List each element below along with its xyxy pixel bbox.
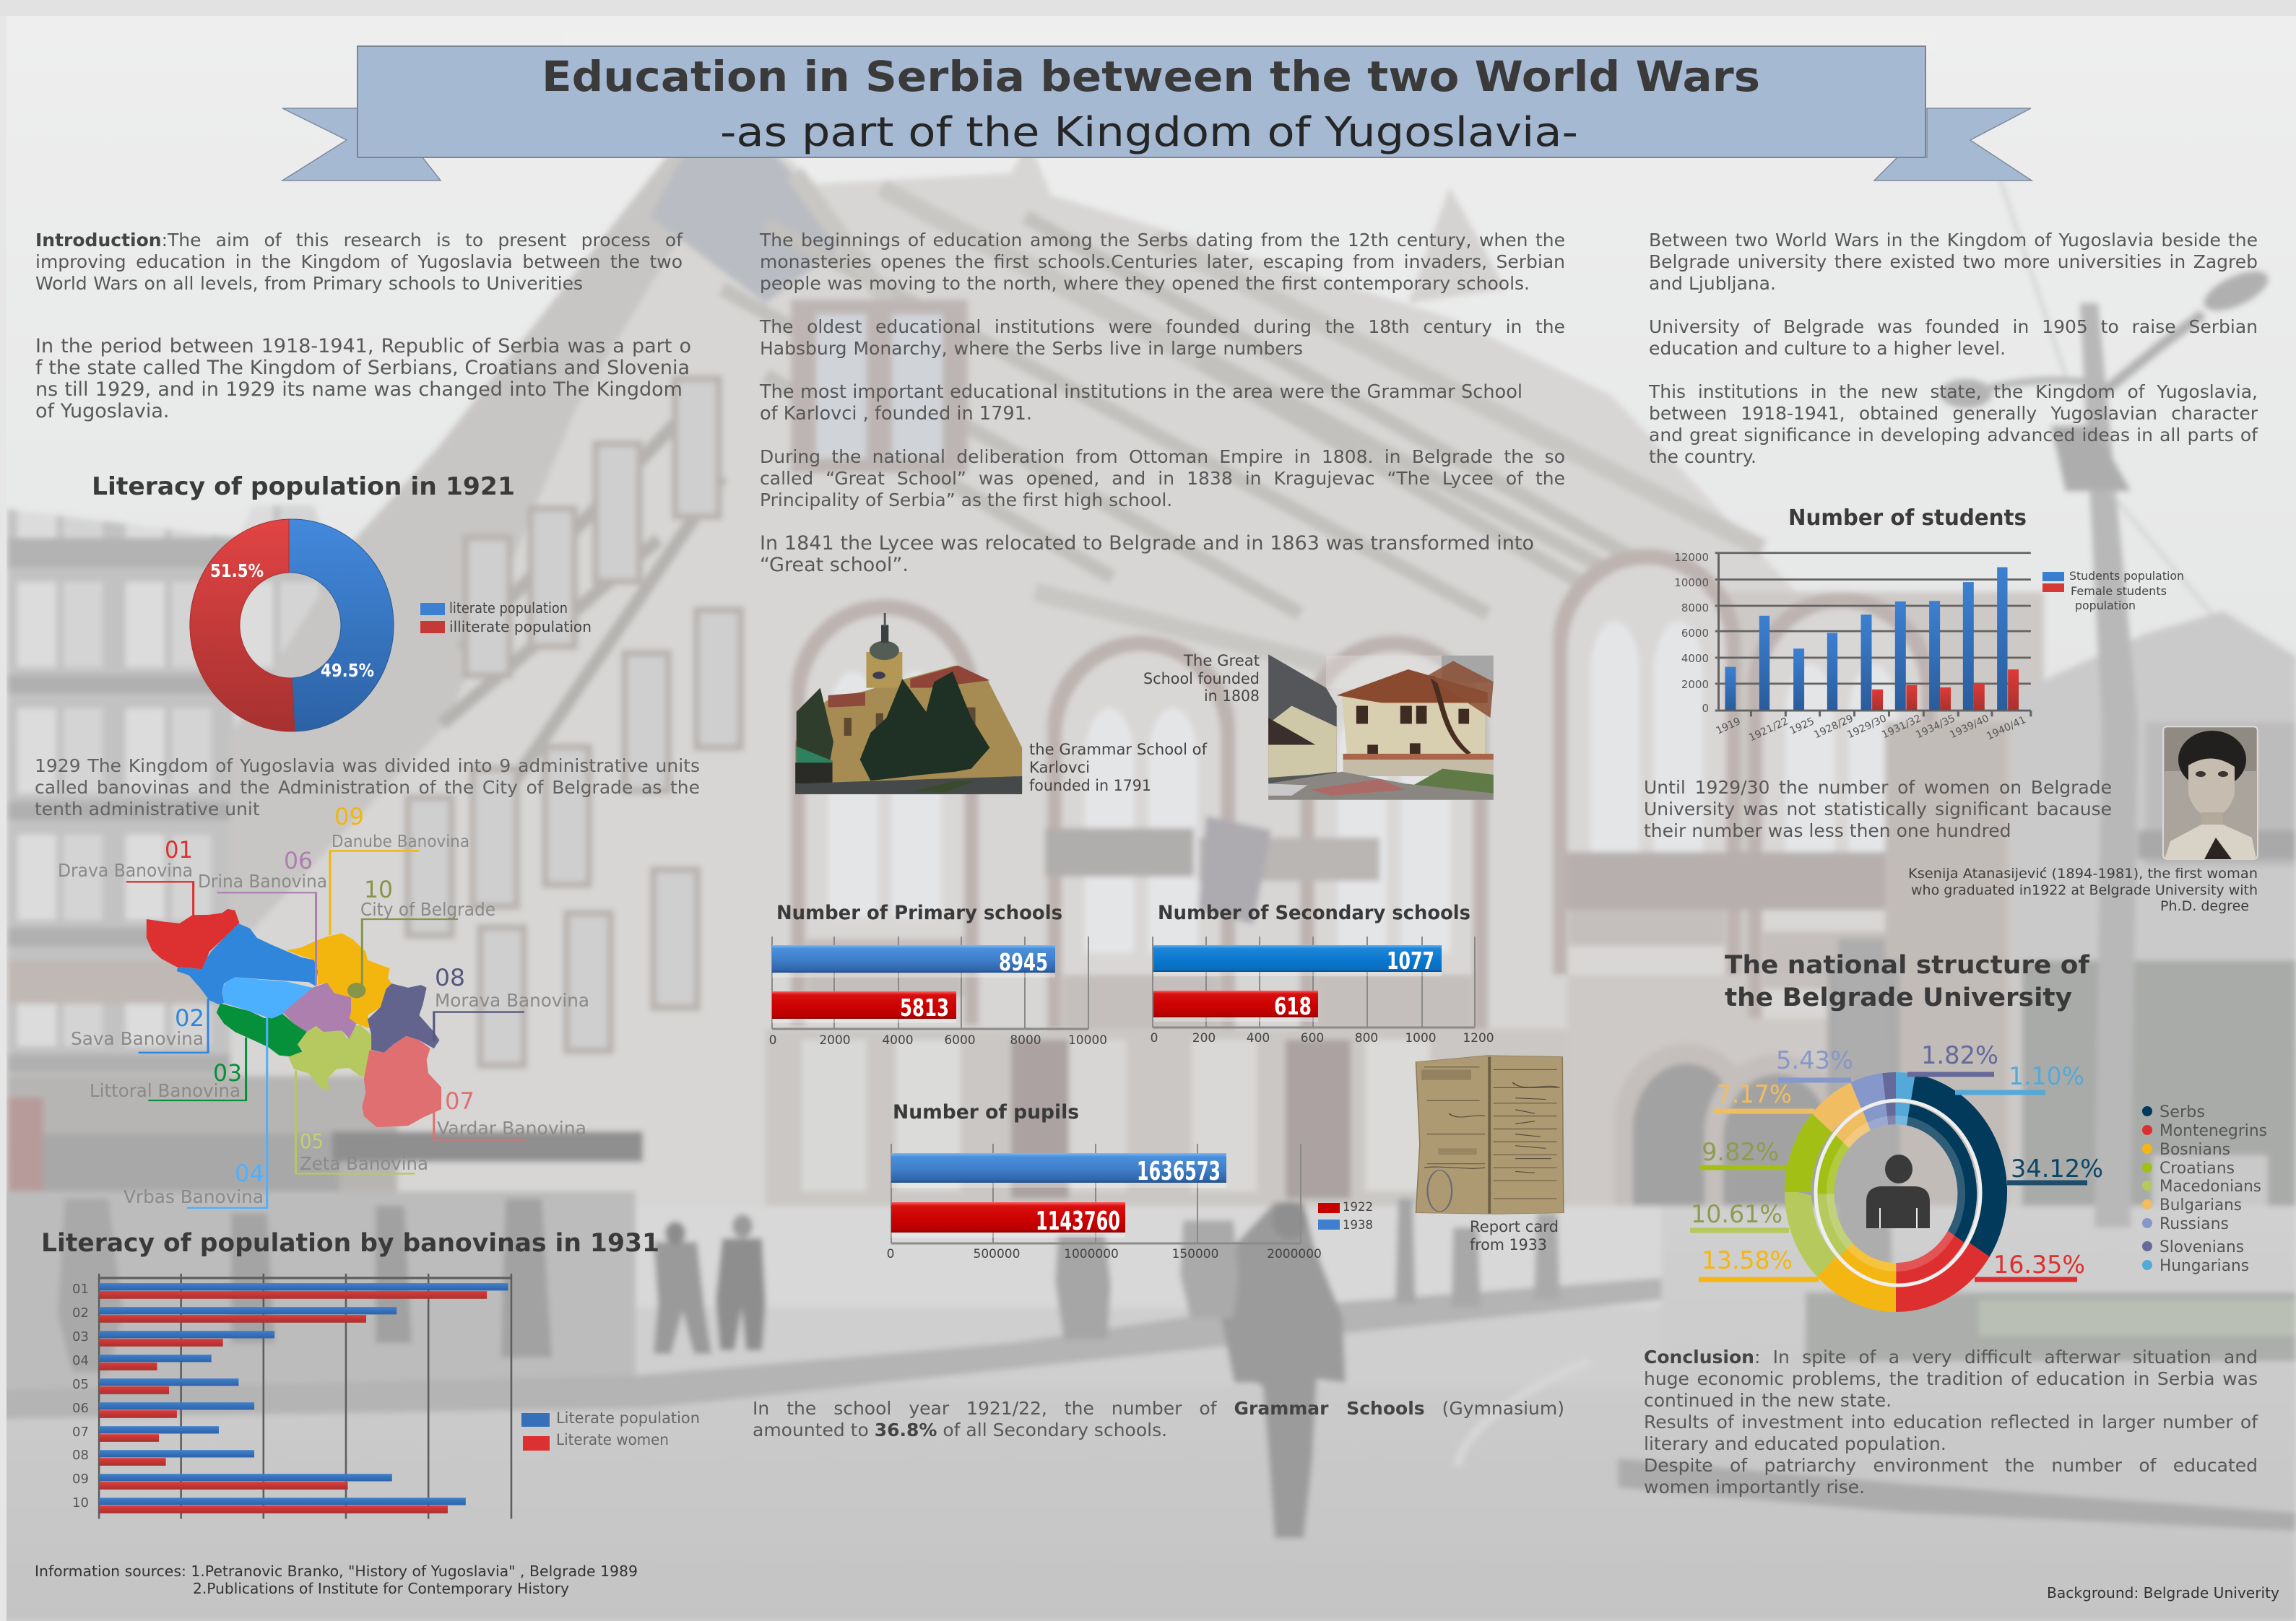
map labels: Drina Banovina [198,871,327,892]
axis labels: 1000000 [1064,1247,1119,1261]
background credit: Background: Belgrade Univerity [2047,1584,2279,1602]
x axis labels: 1928/29 [1812,713,1855,741]
photo: Grammar School of Karlovci [795,613,1022,794]
text: women at university [1644,777,2112,842]
axis labels: 150000 [1172,1247,1218,1261]
x axis labels: 1929/30 [1845,713,1889,741]
legend: national structure: Hungarians [2159,1257,2249,1275]
text: oldest institutions [760,316,1565,359]
caption: Grammar School [1029,741,1208,794]
text: Lycee relocated [760,532,1534,576]
text: conclusion: Despite of patriarchy environment the number of educated [1644,1455,2258,1476]
category labels: 10 [72,1495,89,1511]
student bars [1725,568,2019,710]
legend: national structure: Montenegrins [2159,1122,2267,1140]
x axis labels: 1931/32 [1880,713,1923,741]
text: period 1918-1941: ns till 1929, and in 1929 its name was changed into The Kingdom [35,378,683,401]
icon: person [1866,1155,1930,1228]
grid and axis [891,1144,1301,1243]
text: beginnings of education [760,230,1565,294]
text: Grammar Schools share: In the school year 1921/22, the number of Grammar Schools (Gymnasium) [753,1398,1564,1419]
legend: Students population [2069,569,2184,583]
text: universities: Belgrade university there existed two more universities in Zagreb [1649,251,2258,272]
axis labels [1151,1031,1494,1046]
category labels: 02 [72,1305,89,1321]
text: Grammar School of Karlovci: of Karlovci , founded in 1791. [760,403,1032,425]
map labels [58,803,589,1207]
text: administrative units: tenth administrative unit [35,799,260,820]
legend: national structure: Slovenians [2159,1238,2244,1256]
left shopfront [7,1076,643,1372]
legend: literacy 1921: illiterate population [449,618,592,635]
y axis labels: 12000 [1674,551,1709,564]
inner band [1824,1113,1967,1274]
bar 8945 [772,945,1055,973]
text: introduction: improving education in the Kingdom of Yugoslavia between the two [35,251,683,272]
bar chart: Primary schools [769,936,1107,1048]
axis labels: 2000 [819,1033,851,1048]
value 51.5%: 51.5% [210,560,264,581]
caption: Grammar School: Karlovci [1029,759,1090,776]
callout values [1691,1041,2103,1279]
map regions [147,909,441,1127]
street [0,1191,2296,1621]
text: Great School: During the national deliberation from Ottoman Empire in 1808. in Belgrade the so [760,446,1565,467]
text: oldest institutions: Habsburg Monarchy, where the Serbs live in large numbers [760,338,1303,359]
text: Grammar Schools share: amounted to 36.8% of all Secondary schools. [753,1420,1167,1440]
y axis labels: 4000 [1681,652,1709,665]
legend: national structure: Russians [2159,1215,2229,1233]
x axis labels: 1921/22 [1747,716,1790,744]
portrait caption [1908,866,2258,914]
text: Great School [760,446,1565,510]
map labels: Sava Banovina [71,1028,204,1049]
information sources [35,1563,638,1597]
map labels: 03 [213,1059,242,1087]
category labels: 09 [72,1472,89,1487]
y axis labels [1674,551,1709,715]
text: women at university: Until 1929/30 the number of women on Belgrade [1644,777,2112,798]
text: conclusion: women importantly rise. [1644,1477,1865,1498]
category labels: 05 [72,1377,89,1392]
map labels: 05 [300,1129,324,1153]
text: administrative units: 1929 The Kingdom of Yugoslavia was divided into 9 administrative units [35,755,700,776]
subtitle: -as part of the Kingdom of Yugoslavia- [720,109,1578,156]
value 5813: 5813 [900,994,949,1022]
axis labels: 200 [1192,1031,1216,1046]
category labels: 08 [72,1448,89,1463]
category labels: 06 [72,1401,89,1416]
category labels: 03 [72,1329,89,1344]
bar 1077 [1153,945,1442,972]
grid and axis [1153,936,1475,1027]
axis labels [769,1033,1107,1048]
legend: Female students [2071,584,2167,598]
heading: literacy by banovinas: Literacy of population by banovinas in 1931 [41,1229,659,1258]
heading: Number of students: Number of students [1788,505,2027,531]
text: administrative units [35,755,700,820]
title: Education in Serbia between the two World Wars [542,52,1760,101]
x axis labels: 1919 [1715,716,1743,737]
legend: 1922 [1343,1200,1373,1214]
map labels: Danube Banovina [332,833,469,851]
bar 618 [1153,991,1318,1017]
text: new state [1649,381,2258,468]
heading: Number of pupils: Number of pupils [893,1101,1079,1124]
bar 1636573 [891,1153,1226,1183]
map labels: Vrbas Banovina [124,1186,264,1207]
portrait caption: Ksenija Atanasijević (1894-1981), the first woman [1908,866,2258,882]
text: conclusion [1644,1347,2258,1498]
axis labels: 8000 [1010,1033,1041,1048]
axis labels: 6000 [944,1033,976,1048]
bar 5813 [772,991,956,1019]
axis labels: 600 [1301,1031,1324,1046]
x axis labels: 1939/40 [1948,713,1991,741]
x axis labels: 1925 [1788,716,1816,737]
bar chart: Secondary schools [1151,936,1494,1046]
outer band [1798,1087,1993,1298]
value 49.5%: 49.5% [321,660,374,681]
y axis labels: 2000 [1681,678,1709,691]
column chart: Number of students [1674,551,2184,744]
text: Lycee relocated: “Great school”. [760,554,909,576]
caption: report card: Report card [1470,1218,1559,1235]
legend: 1938 [1343,1218,1373,1233]
caption: The Great School: The Great [1183,652,1260,669]
legend: national structure: Macedonians [2159,1178,2261,1196]
text: Lycee relocated: In 1841 the Lycee was relocated to Belgrade and in 1863 was transformed into [760,532,1534,555]
caption: The Great School [1143,652,1260,705]
text: University of Belgrade: University of Belgrade was founded in 1905 to raise Serbian [1649,316,2258,337]
banner body [358,46,1925,157]
text: Grammar School of Karlovci [760,381,1522,425]
caption: Grammar School: the Grammar School of [1029,741,1208,758]
map labels: Zeta Banovina [300,1153,428,1174]
donut chart: literacy 1921 [190,519,394,731]
y axis labels: 10000 [1674,576,1709,589]
text: beginnings of education: The beginnings of education among the Serbs dating from the 12th century, when the [760,230,1565,251]
text: conclusion: huge economic problems, the tradition of education in Serbia was [1644,1368,2258,1389]
category labels: 07 [72,1425,89,1440]
map labels: 07 [445,1087,475,1115]
left neighbouring building [7,505,404,1242]
text: conclusion: literary and educated population. [1644,1433,1946,1454]
axis labels: 500000 [974,1247,1020,1261]
bar 1143760 [891,1202,1125,1233]
illiterate slice [190,519,295,731]
category labels [72,1282,89,1511]
caption: The Great School: School founded [1143,670,1260,687]
axis labels: 1000 [1405,1031,1437,1046]
caption: Grammar School: founded in 1791 [1029,777,1151,794]
legend: national structure: Croatians [2159,1160,2235,1178]
map labels: City of Belgrade [360,899,495,920]
pedestrians [58,1199,1560,1538]
value 1077: 1077 [1387,947,1434,975]
main building facade [230,92,2066,1242]
category labels: 04 [72,1353,89,1368]
axis labels: 4000 [882,1033,914,1048]
text: introduction [35,230,683,294]
heading: Primary schools: Number of Primary schools [776,902,1062,924]
portrait caption: Ph.D. degree [2160,898,2249,914]
value 8945: 8945 [999,948,1048,976]
text: Great School: called “Great School” was opened, and in 1838 in Kragujevac “The Lycee of the [760,468,1565,489]
axis labels: 0 [1151,1031,1158,1046]
legend [2042,569,2184,612]
value 618: 618 [1274,992,1312,1020]
callout values: 9.82% [1702,1138,1779,1167]
photo: The Great School [1268,654,1494,800]
callout values: 1.10% [2009,1062,2084,1091]
far right buildings [2015,611,2296,1278]
callout values: 10.61% [1691,1200,1782,1229]
text: conclusion: Conclusion: In spite of a very difficult afterwar situation and [1644,1347,2258,1368]
legend: national structure: Bosnians [2159,1141,2230,1159]
text: new state: between 1918-1941, obtained generally Yugoslavian character [1649,403,2258,424]
right wing with red arches [1553,549,2044,1285]
value 1143760: 1143760 [1036,1207,1120,1236]
portrait caption: who graduated in1922 at Belgrade University with [1911,882,2258,898]
text: introduction: World Wars on all levels, from Primary schools to Univerities [35,273,583,294]
caption: report card [1470,1218,1559,1253]
text: period 1918-1941: In the period between 1918-1941, Republic of Serbia was a part o [35,335,691,357]
map of banovinas [58,803,589,1208]
text: women at university: University was not statistically significant bacause [1644,799,2112,820]
axis labels: 1200 [1463,1031,1494,1046]
heading: national structure: The national structure of [1725,951,2090,980]
y axis labels: 0 [1702,702,1709,715]
map labels: 08 [435,964,465,991]
chart legend [521,1409,700,1451]
map labels: Drava Banovina [58,860,193,881]
axis labels: 2000000 [1267,1247,1322,1261]
information sources: 2.Publications of Institute for Contemporary History [193,1580,569,1597]
text: oldest institutions: The oldest educational institutions were founded during the 18th century in the [760,316,1565,337]
text: universities: and Ljubljana. [1649,273,1776,294]
chart legend: Literate women [556,1431,669,1448]
text: universities [1649,230,2258,294]
map leader lines [126,851,525,1208]
callout values: 13.58% [1702,1246,1793,1275]
text: introduction: Introduction:The aim of this research is to present process of [35,230,683,251]
portrait: Ksenija Atanasijević [2163,726,2258,859]
category labels: 01 [72,1282,89,1297]
text: University of Belgrade [1649,316,2258,359]
legend: national structure [2142,1103,2267,1275]
legend: population [2075,599,2136,612]
heading: Secondary schools: Number of Secondary schools [1158,902,1470,924]
map labels: Morava Banovina [435,990,589,1011]
text: new state: the country. [1649,446,1756,467]
bar chart: literacy by banovinas [72,1274,700,1519]
callout values: 5.43% [1776,1046,1853,1075]
value 1636573: 1636573 [1137,1157,1221,1186]
photo: report card [1416,1056,1564,1214]
information sources: Information sources: 1.Petranovic Branko, "History of Yugoslavia" , Belgrade 1989 [35,1563,638,1580]
caption: report card: from 1933 [1470,1236,1547,1253]
text: period 1918-1941: of Yugoslavia. [35,400,169,422]
text: period 1918-1941: f the state called The Kingdom of Serbians, Croatians and Slovenia [35,357,690,379]
callout values: 1.82% [1921,1041,1998,1070]
chart legend: Literate population [556,1409,700,1427]
white ring [1816,1100,1980,1285]
text: conclusion: Results of investment into education reflected in larger number of [1644,1412,2258,1433]
donut chart: national structure [1690,1041,2103,1298]
legend: national structure: Serbs [2159,1103,2205,1121]
x axis labels [1715,713,2028,744]
text: period 1918-1941 [35,335,691,422]
grid [1715,552,2031,716]
map labels: Littoral Banovina [90,1080,241,1101]
text: University of Belgrade: education and culture to a higher level. [1649,338,2006,359]
text: women at university: their number was less then one hundred [1644,820,2011,841]
legend: national structure: Bulgarians [2159,1196,2242,1214]
map labels: 04 [235,1160,264,1187]
map labels: 02 [175,1004,204,1032]
caption: The Great School: in 1808 [1204,687,1260,705]
map labels: 10 [364,876,393,903]
x axis labels: 1934/35 [1914,713,1957,741]
axis labels: 0 [887,1247,894,1261]
axis labels: 10000 [1068,1033,1107,1048]
axis labels: 800 [1355,1031,1378,1046]
text: beginnings of education: people was moving to the north, where they opened the first contemporary schools. [760,273,1530,294]
heading: literacy 1921: Literacy of population in 1921 [92,472,515,501]
x axis labels: 1940/41 [1985,714,2028,742]
text: Grammar School of Karlovci: The most important educational institutions in the area were the Grammar School [760,381,1522,403]
text: Grammar Schools share [753,1398,1564,1440]
lamp posts [1834,181,2296,1285]
map labels: 01 [165,836,193,864]
callout values: 34.12% [2011,1155,2103,1183]
text: beginnings of education: monasteries openes the first schools.Centuries later, escaping from invaders, Serbian [760,251,1565,272]
chart grid [98,1274,511,1519]
legend: literacy 1921: literate population [449,599,568,617]
text: new state: This institutions in the new state, the Kingdom of Yugoslavia, [1649,381,2258,402]
banner left tail [282,108,441,181]
callout values: 16.35% [1993,1251,2085,1279]
title banner [282,46,2032,181]
banner right tail [1874,108,2032,181]
text: universities: Between two World Wars in the Kingdom of Yugoslavia beside the [1649,230,2258,251]
text: administrative units: called banovinas and the Administration of the City of Belgrade as the [35,777,700,798]
text: Great School: Principality of Serbia” as the first high school. [760,490,1172,510]
map labels: 06 [284,847,313,874]
axis labels: 0 [769,1033,776,1048]
grid and axis [772,936,1088,1029]
callout values: 7.17% [1717,1080,1792,1109]
text: conclusion: continued in the new state. [1644,1390,1892,1411]
axis labels [887,1247,1322,1261]
y axis labels: 8000 [1681,601,1709,614]
map labels: 09 [334,803,364,830]
text: new state: and great significance in developing advanced ideas in all parts of [1649,425,2258,446]
callout lines [1690,1074,2087,1279]
legend: literacy 1921 [420,599,592,635]
heading: national structure [1725,951,2090,1012]
axis labels: 400 [1247,1031,1270,1046]
literate slice [289,519,394,731]
chart bars [99,1283,508,1513]
heading: national structure: the Belgrade University [1725,983,2072,1012]
y axis labels: 6000 [1681,627,1709,640]
legend [1318,1200,1373,1233]
map labels: Vardar Banovina [437,1118,586,1139]
bar chart: Number of pupils [887,1144,1373,1261]
